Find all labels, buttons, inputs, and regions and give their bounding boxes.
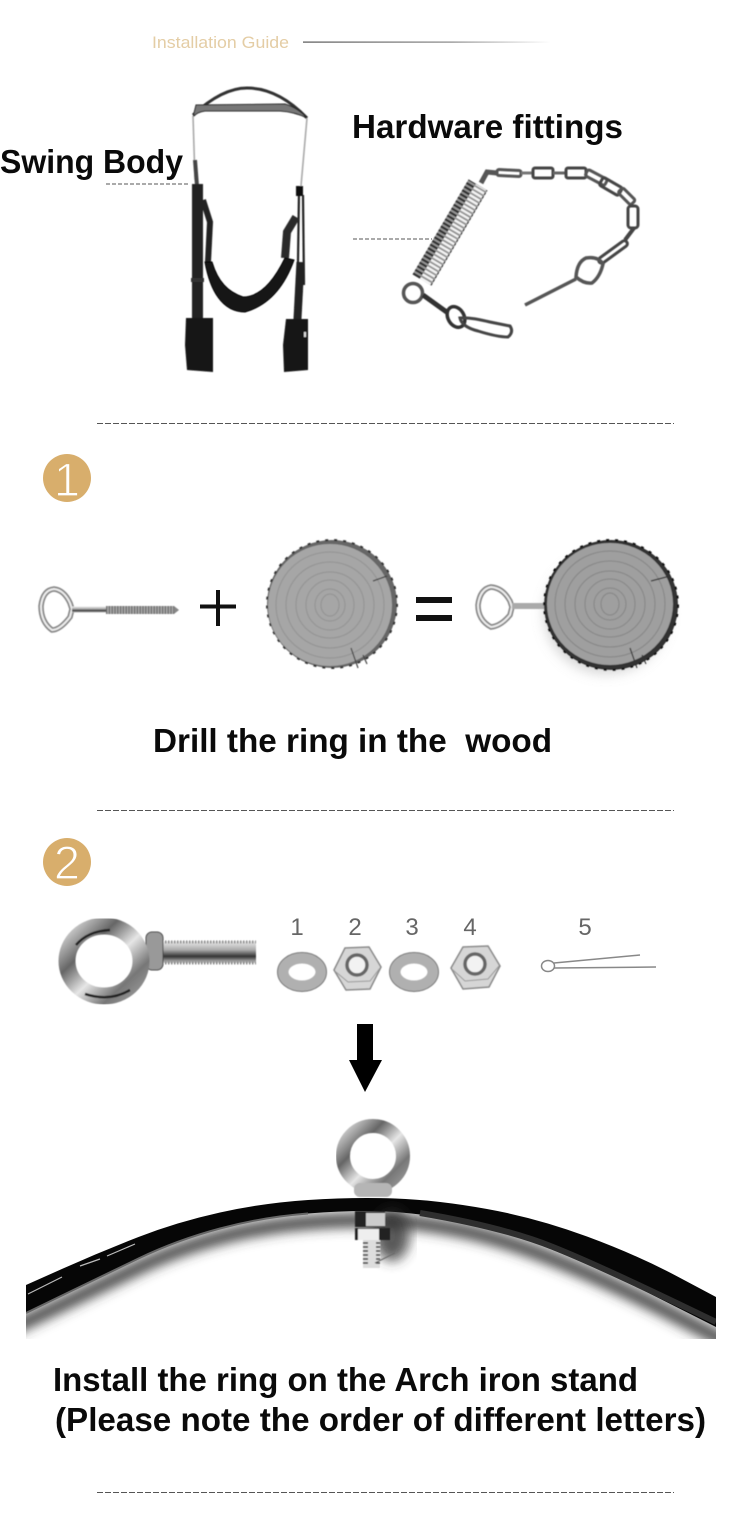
icon: washer 1	[278, 952, 326, 992]
labels: part numbers: 2	[348, 914, 362, 941]
arrow: down	[349, 1024, 382, 1092]
label: Swing Body: Swing Body	[0, 143, 184, 180]
labels: part numbers: 1	[290, 914, 304, 941]
badge: step 2: 2	[54, 836, 80, 889]
icon: washer 3	[390, 952, 438, 992]
icon: wood slice with eye screw	[478, 540, 678, 674]
divider	[97, 1492, 674, 1494]
icon: eye bolt mounted on the arch	[343, 1126, 410, 1268]
caption: step 2	[53, 1361, 706, 1438]
heading: Installation Guide: Installation Guide	[152, 33, 289, 52]
icon: nut 2	[334, 947, 381, 990]
icon: plus sign	[200, 590, 236, 626]
icon: nut 4	[451, 946, 500, 989]
icon: equals sign	[416, 597, 452, 621]
badge: step 2	[43, 836, 91, 889]
caption: step 1: Drill the ring in the wood	[153, 722, 552, 759]
icon: arch iron stand	[26, 1198, 716, 1339]
divider	[97, 422, 674, 424]
labels: part numbers	[290, 914, 592, 941]
labels: part numbers: 3	[405, 914, 419, 941]
caption: step 2: Install the ring on the Arch iron stand	[53, 1361, 638, 1398]
labels: part numbers: 5	[578, 914, 592, 941]
badge: step 1: 1	[54, 453, 80, 506]
labels: part numbers: 4	[463, 914, 477, 941]
label: Hardware fittings: Hardware fittings	[352, 108, 623, 145]
badge: step 1	[43, 453, 91, 506]
caption: step 2: (Please note the order of different letters)	[55, 1401, 706, 1438]
divider	[97, 810, 674, 812]
icon: swing body	[185, 88, 308, 372]
icon: wood slice	[267, 540, 397, 668]
icon: spring with chain, eye screw and carabiner	[404, 168, 638, 337]
icon: cotter pin	[542, 955, 656, 972]
icon: eye screw	[41, 589, 179, 630]
icon: lifting eye bolt	[67, 926, 256, 997]
